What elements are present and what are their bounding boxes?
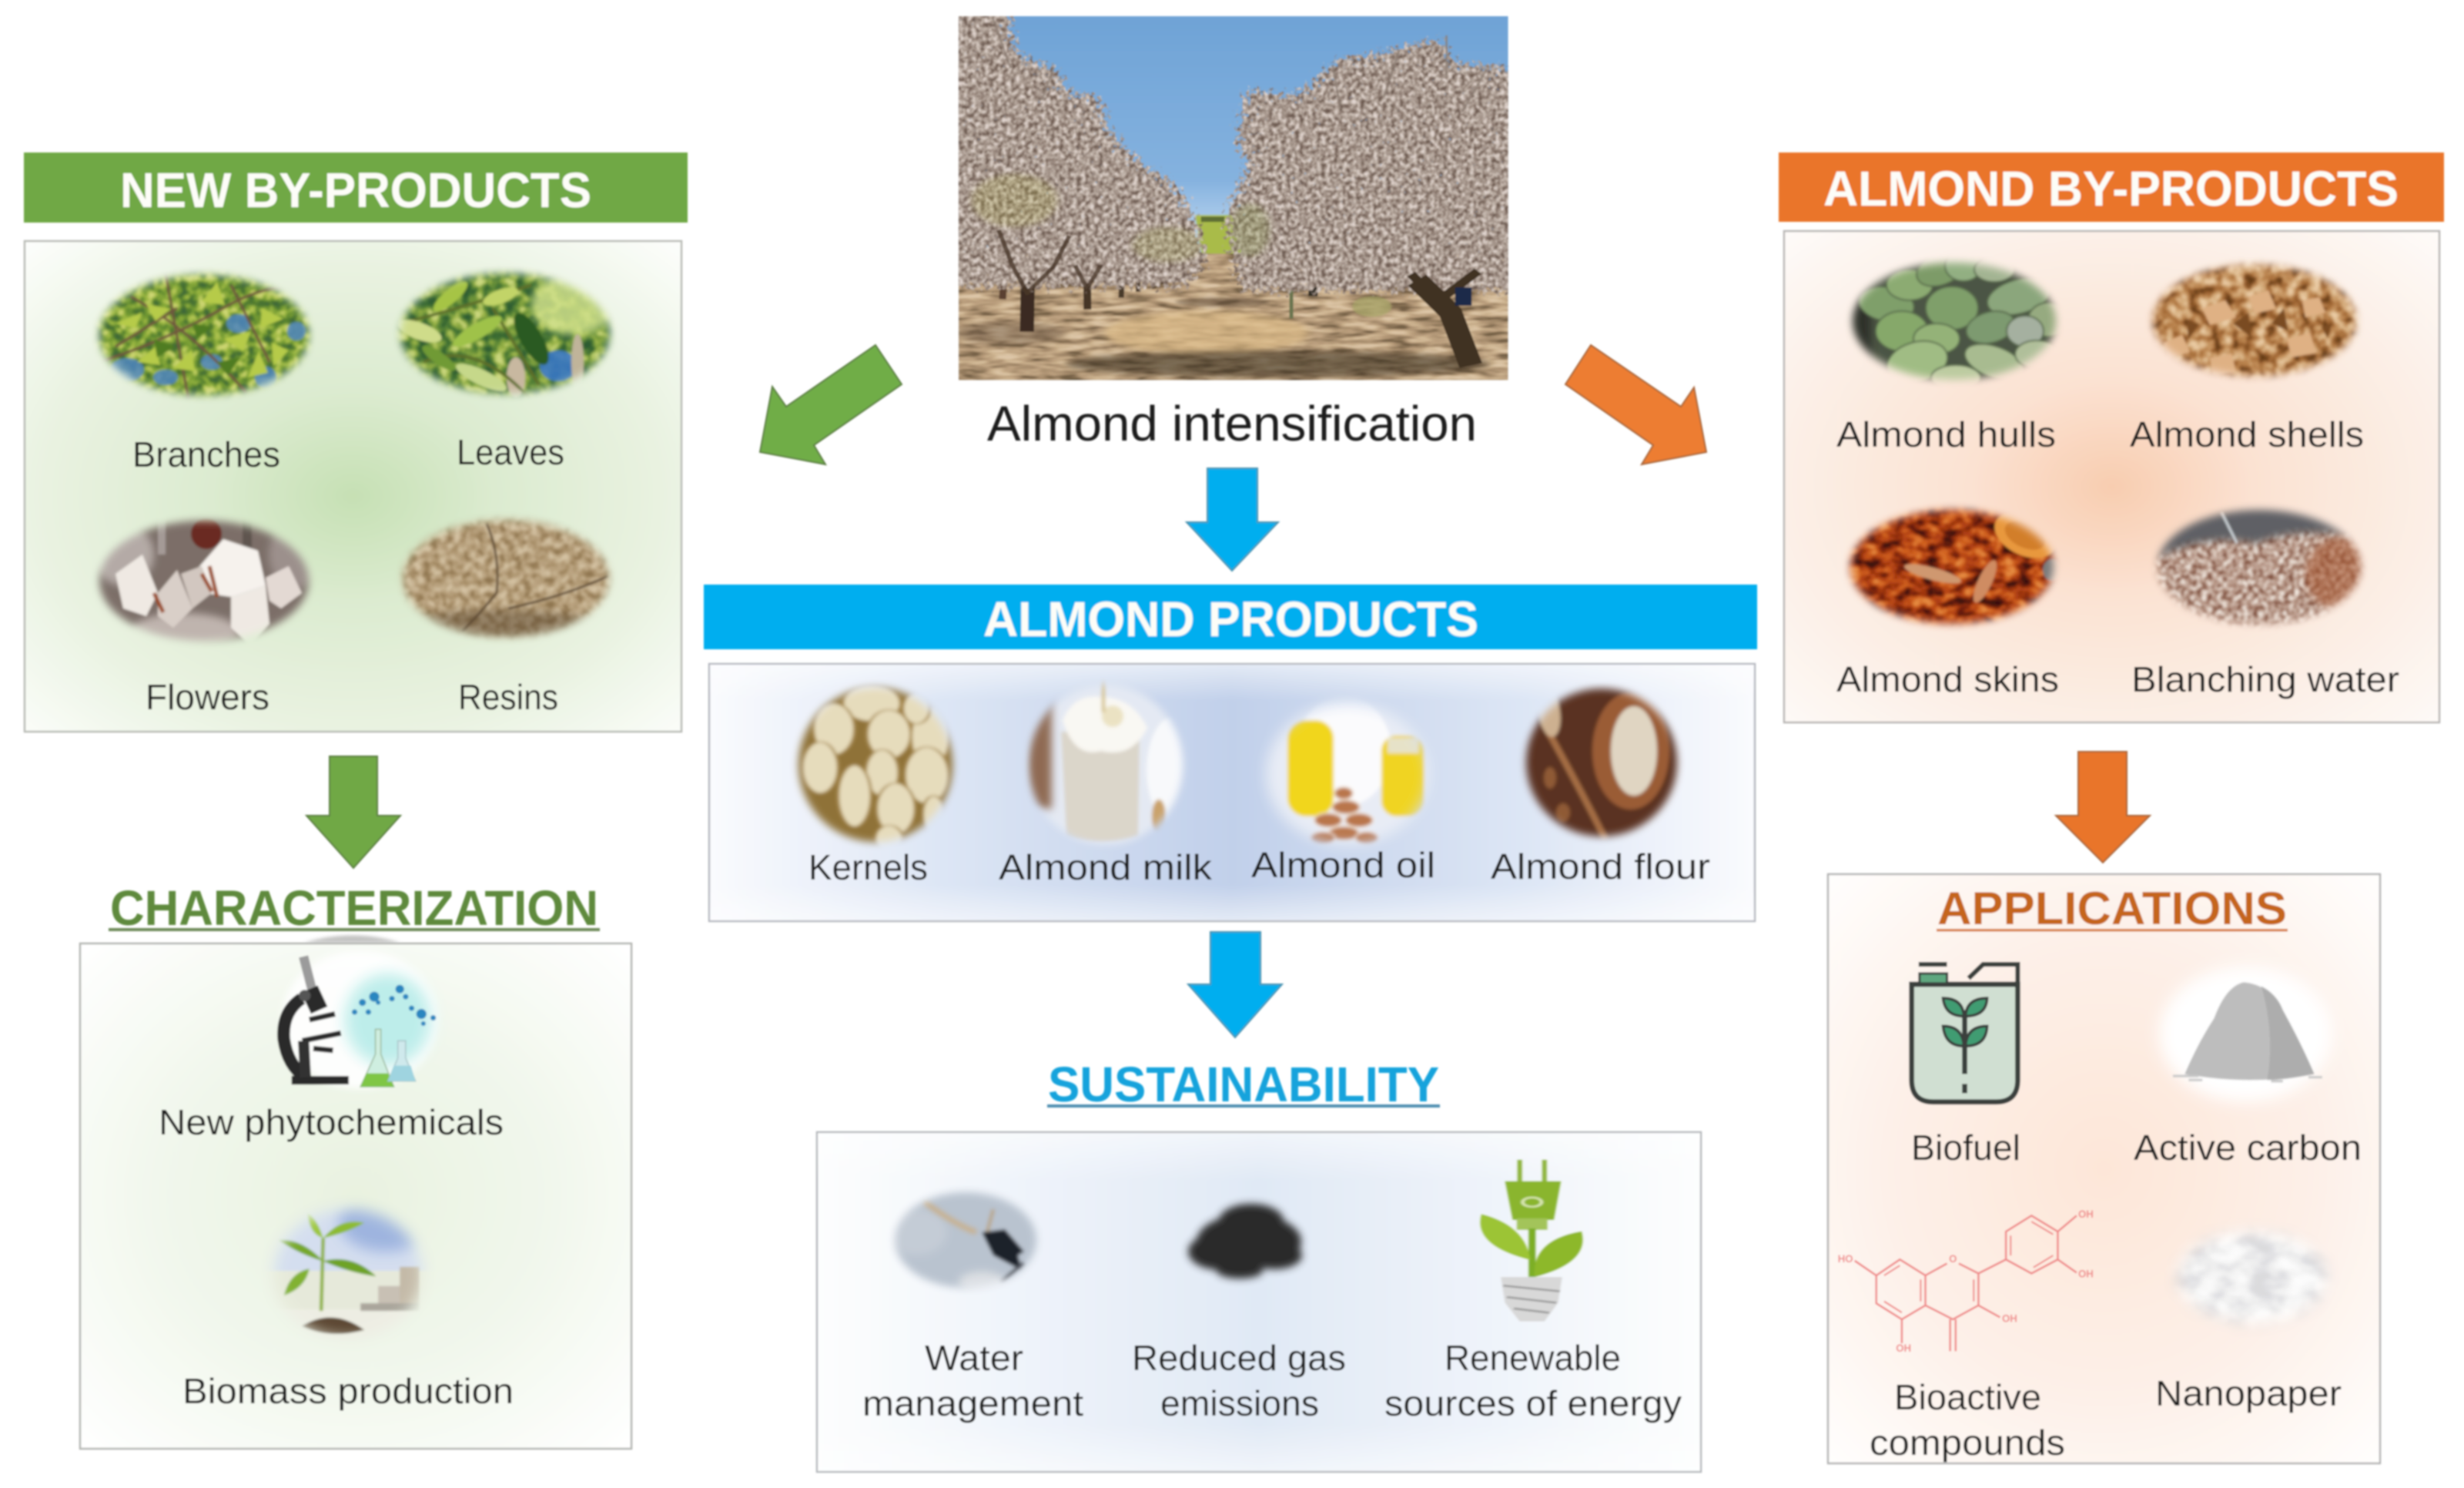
icon: plug plant bulb — [1480, 1160, 1583, 1322]
photo: water management — [870, 1178, 1055, 1332]
icon: bioactive molecule: OH — [2002, 1313, 2017, 1325]
label: biomass production: Biomass production — [182, 1371, 514, 1411]
label: bioactive compounds: Bioactive — [1894, 1377, 2041, 1417]
label: branches: Branches — [132, 434, 280, 474]
panel: sustainability — [817, 1132, 1701, 1472]
heading: applications: APPLICATIONS — [1937, 883, 2287, 934]
icon: bioactive molecule: O — [1949, 1253, 1957, 1265]
icon: microscope and flasks — [282, 950, 439, 1089]
panel: characterization — [80, 935, 631, 1449]
label: reduced gas emissions — [1132, 1338, 1346, 1423]
icon: bioactive molecule: OH — [2078, 1268, 2094, 1280]
photo: almond oil — [1247, 685, 1448, 863]
label: water management: management — [862, 1383, 1083, 1423]
header: almond products: ALMOND PRODUCTS — [983, 592, 1478, 647]
icon: bioactive molecule: OH — [2078, 1208, 2094, 1220]
label: resins: Resins — [458, 677, 558, 717]
label: renewable sources of energy — [1384, 1338, 1682, 1423]
header: almond products — [704, 585, 1757, 649]
icon: biofuel can — [1912, 964, 2017, 1102]
panel: applications — [1828, 874, 2380, 1463]
photo: leaves — [394, 267, 616, 400]
photo: flowers — [94, 514, 314, 645]
photo: almond skins — [1833, 493, 2079, 639]
panel: new by-products — [25, 241, 681, 732]
label: renewable sources of energy: sources of energy — [1384, 1383, 1682, 1423]
photo: almond flour — [1502, 682, 1702, 847]
arrow: to applications — [2056, 752, 2150, 863]
panel: almond by-products — [1784, 231, 2439, 722]
heading: characterization: CHARACTERIZATION — [110, 880, 598, 936]
label: water management — [862, 1338, 1083, 1423]
icon: bioactive molecule: HO — [1838, 1253, 1853, 1265]
label: kernels: Kernels — [808, 847, 928, 887]
icon: bioactive molecule — [1838, 1208, 2094, 1354]
photo: nanopaper — [2148, 1217, 2356, 1348]
panel: almond products — [709, 664, 1755, 921]
label: bioactive compounds — [1870, 1377, 2065, 1463]
arrow: to characterization — [306, 756, 400, 868]
header: new by-products: NEW BY-PRODUCTS — [120, 163, 591, 218]
label: almond shells: Almond shells — [2130, 414, 2364, 454]
icon: smoke cloud — [1188, 1204, 1302, 1279]
icon: bioactive molecule: OH — [1896, 1342, 1911, 1354]
label: blanching water: Blanching water — [2131, 659, 2399, 699]
label: flowers: Flowers — [146, 677, 270, 717]
icon: active carbon pile — [2159, 967, 2332, 1102]
photo: resins — [398, 514, 614, 642]
photo: seedling and plant — [272, 1202, 424, 1336]
arrow: to almond by-products — [1565, 345, 1706, 464]
label: biofuel: Biofuel — [1911, 1128, 2020, 1168]
heading: sustainability: SUSTAINABILITY — [1048, 1057, 1439, 1112]
photo: almond hulls — [1833, 246, 2079, 400]
photo: almond milk — [1024, 681, 1186, 846]
label: reduced gas emissions: emissions — [1160, 1383, 1319, 1423]
label: reduced gas emissions: Reduced gas — [1132, 1338, 1346, 1378]
label: almond milk: Almond milk — [999, 847, 1213, 887]
photo: blanching water — [2141, 493, 2387, 639]
photo: branches — [93, 268, 315, 401]
label: almond oil: Almond oil — [1251, 845, 1435, 885]
arrow: to almond products — [1187, 468, 1278, 571]
arrow: to new by-products — [760, 345, 902, 464]
photo: kernels — [792, 681, 959, 848]
caption: almond intensification: Almond intensification — [987, 396, 1477, 451]
label: nanopaper: Nanopaper — [2155, 1373, 2342, 1413]
label: almond hulls: Almond hulls — [1836, 414, 2056, 454]
label: active carbon: Active carbon — [2134, 1128, 2362, 1168]
label: water management: Water — [925, 1338, 1023, 1378]
label: almond flour: Almond flour — [1491, 846, 1710, 886]
label: leaves: Leaves — [457, 432, 564, 472]
label: new phytochemicals: New phytochemicals — [159, 1102, 504, 1142]
photo: almond shells — [2133, 246, 2379, 393]
photo: almond orchard — [957, 15, 1509, 382]
label: almond skins: Almond skins — [1836, 659, 2059, 699]
label: bioactive compounds: compounds — [1870, 1423, 2065, 1463]
header: almond by-products: ALMOND BY-PRODUCTS — [1823, 161, 2399, 216]
header: new by-products — [24, 152, 688, 223]
label: renewable sources of energy: Renewable — [1445, 1338, 1621, 1378]
arrow: to sustainability — [1188, 932, 1282, 1037]
